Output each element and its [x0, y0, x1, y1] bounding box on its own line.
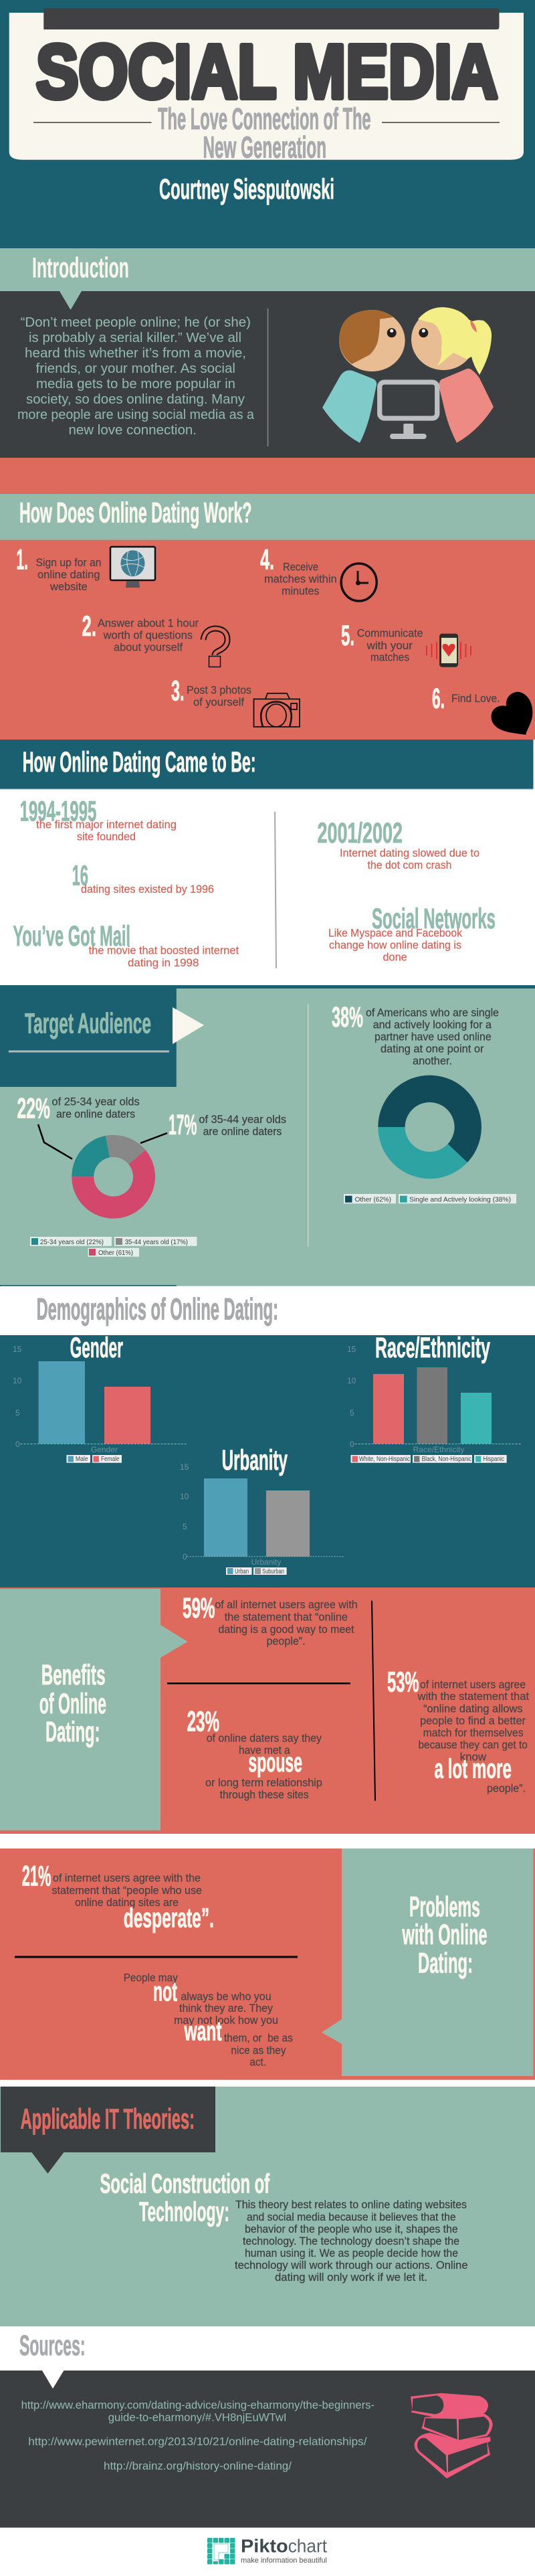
fact: you've got mail: You’ve Got Mail [13, 920, 130, 952]
step 4: minutes [282, 585, 320, 598]
stat: 59 percent: dating is a good way to meet [218, 1623, 354, 1636]
legend: age groups: 25-34 years old (22%) [40, 1238, 104, 1246]
fact: 1994-1995: site founded [77, 831, 136, 843]
bar chart: race and ethnicity [347, 1332, 522, 1463]
step 2 [82, 610, 227, 667]
heading: benefits [39, 1659, 106, 1748]
bar chart: gender: 15 [13, 1345, 22, 1354]
text: people may not: nice as they [231, 2044, 286, 2057]
step 5 [341, 620, 471, 667]
piktochart logo: make information beautiful [241, 2557, 327, 2565]
legend: actively looking [344, 1194, 516, 1204]
step 3 [171, 675, 300, 727]
step 6: Find Love. [451, 692, 500, 705]
heading: demographics: Demographics of Online Dating: [37, 1292, 278, 1326]
bar chart: gender [13, 1332, 187, 1463]
bar chart: race and ethnicity: 10 [347, 1376, 356, 1385]
intro text: heard this whether it’s from a movie, [25, 345, 246, 361]
intro text: more people are using social media as a [17, 407, 255, 422]
intro text: media gets to be more popular in [36, 376, 235, 392]
fact: you've got mail: the movie that boosted internet [89, 944, 239, 957]
bar chart: gender: Gender [70, 1332, 123, 1364]
piktochart logo: chart [288, 2535, 327, 2556]
step 5: matches [370, 651, 409, 664]
fact: you've got mail [13, 920, 239, 969]
stat: 22 percent: of 25-34 year olds [52, 1096, 140, 1108]
legend: age groups [30, 1237, 197, 1257]
step 6 [432, 683, 532, 735]
stat: 23 percent: or long term relationship [205, 1776, 322, 1789]
text: people may not: People may [124, 1972, 178, 1984]
source links [21, 2399, 374, 2472]
panel: how online dating came to be [0, 740, 534, 969]
bar chart: urbanity [180, 1444, 344, 1575]
stat: 38 percent: partner have used online [374, 1031, 492, 1043]
panel: demographics charts [0, 1332, 535, 1587]
source links: http://www.eharmony.com/dating-advice/using-eharmony/the-beginners- [21, 2399, 374, 2411]
stat: 21 percent [22, 1860, 214, 1933]
stat: 23 percent: of online daters say they [207, 1732, 322, 1745]
step 2: Answer about 1 hour [98, 617, 199, 630]
bar chart: gender: Female [101, 1455, 120, 1463]
stat: 53 percent: “online dating allows [423, 1703, 523, 1715]
stat: 22 percent: are online daters [56, 1108, 135, 1120]
fact: 2001/2002: 2001/2002 [317, 817, 403, 849]
piktochart logo: Pikto [241, 2535, 288, 2556]
panel: benefits of online dating [0, 1587, 535, 1834]
source links: guide-to-eharmony/#.VH8njEuWTwI [108, 2411, 287, 2423]
step 1: Sign up for an [36, 556, 102, 569]
intro text: “Don’t meet people online; he (or she) [21, 315, 251, 330]
stat: 53 percent: with the statement that [417, 1690, 529, 1703]
legend: age groups: 35-44 years old (17%) [125, 1238, 188, 1246]
panel: demographics heading [1, 1286, 534, 1335]
text: people may not: think they are. They [179, 2002, 273, 2014]
panel: introduction [0, 248, 535, 458]
heading: how does online dating work: How Does Online Dating Work? [19, 497, 251, 529]
legend: actively looking: Other (62%) [355, 1196, 391, 1204]
bar chart: race and ethnicity: White, Non-Hispanic [359, 1455, 410, 1463]
icon: monitor with globe [110, 547, 155, 588]
stat: 22 percent [17, 1093, 140, 1125]
stat: 23 percent: 23% [187, 1706, 219, 1738]
heading: benefits: of Online [39, 1688, 106, 1720]
text: people may not [124, 1972, 293, 2069]
stat: 59 percent: the statement that “online [225, 1611, 348, 1624]
stat: 53 percent: match for themselves [423, 1727, 524, 1739]
text: people may not: always be who you [181, 1990, 272, 2002]
stat: 53 percent: know [460, 1751, 487, 1764]
step 2: about yourself [114, 641, 183, 654]
fact: social networks: done [383, 951, 407, 964]
bar chart: race and ethnicity: Black, Non-Hispanic [422, 1455, 471, 1463]
fact: 2001/2002: the dot com crash [368, 859, 452, 871]
stat: 21 percent: desperate”. [124, 1902, 214, 1933]
heading: sources: Sources: [19, 2330, 86, 2362]
stat: 38 percent: another. [413, 1055, 452, 1067]
stat: 23 percent: through these sites [220, 1788, 309, 1801]
fact: 16 sites [72, 860, 214, 895]
subheading: social construction of technology: Social Construction of [100, 2168, 270, 2199]
panel: target audience [0, 985, 535, 1286]
fact: you've got mail: dating in 1998 [128, 956, 199, 969]
step 4: Receive [283, 561, 318, 574]
stat: 21 percent: of internet users agree with the [53, 1872, 201, 1885]
theory text: human using it. We as people decide how the [245, 2247, 458, 2259]
stat: 21 percent: 21% [22, 1860, 51, 1892]
piktochart logo [207, 2535, 327, 2565]
step 3: Post 3 photos [187, 684, 251, 697]
bar chart: gender: 10 [13, 1376, 22, 1385]
step 2: 2. [82, 610, 96, 642]
bar chart: race and ethnicity: Hispanic [483, 1455, 504, 1463]
stat: 59 percent [183, 1592, 358, 1648]
bar chart: urbanity: 15 [180, 1462, 189, 1472]
stat: 22 percent: 22% [17, 1093, 50, 1125]
fact: 16 sites: dating sites existed by 1996 [81, 883, 214, 895]
legend: age groups: Other (61%) [98, 1249, 133, 1257]
text: people may not: them, or be as [224, 2032, 293, 2045]
arrow [173, 1007, 204, 1044]
theory text: technology will work through our actions. Online [235, 2259, 468, 2271]
stat: 53 percent: of internet users agree [420, 1679, 526, 1691]
text: people may not: may not look how you [174, 2014, 278, 2027]
stat: 38 percent: and actively looking for a [373, 1019, 492, 1031]
legend: actively looking: Single and Actively looking (38%) [409, 1196, 511, 1204]
step 5: 5. [341, 620, 354, 652]
heading: how online dating came to be: How Online Dating Came to Be: [23, 746, 256, 778]
heading: problems [402, 1891, 488, 1979]
bar chart: gender: 0 [15, 1440, 20, 1449]
bar chart: urbanity: Urbanity [222, 1444, 288, 1476]
bar chart: urbanity: 10 [180, 1492, 189, 1501]
bar chart: race and ethnicity: 5 [350, 1408, 354, 1418]
step 5: with your [366, 639, 413, 652]
panel: problems with online dating [0, 1849, 535, 2080]
heading: target audience: Target Audience [25, 1007, 151, 1039]
fact: 2001/2002: Internet dating slowed due to [340, 847, 479, 859]
bar chart: urbanity: 0 [183, 1552, 187, 1561]
subheading: social construction of technology [100, 2168, 270, 2227]
intro text: society, so does online dating. Many [26, 392, 245, 407]
stat: 53 percent: 53% [387, 1666, 419, 1699]
bar chart: urbanity: Suburban [262, 1567, 284, 1575]
theory text [235, 2199, 468, 2284]
step 6: 6. [432, 683, 445, 715]
step 1: 1. [16, 544, 28, 576]
heading: benefits: Benefits [41, 1659, 106, 1691]
theory text: This theory best relates to online dating websites [235, 2199, 467, 2211]
fact: 2001/2002 [317, 817, 479, 871]
bar chart: urbanity: 5 [183, 1522, 187, 1531]
stat: 23 percent: have met a [239, 1744, 290, 1757]
icon: phone with heart [427, 634, 471, 667]
step 5: Communicate [357, 627, 423, 640]
text: people may not: act. [250, 2056, 266, 2069]
fact: 1994-1995: the first major internet dating [36, 819, 177, 831]
bar chart: race and ethnicity: 15 [347, 1345, 356, 1354]
step 4: 4. [260, 544, 274, 576]
source links: http://www.pewinternet.org/2013/10/21/online-dating-relationships/ [28, 2435, 367, 2448]
callout lines [38, 1124, 167, 1159]
text: people may not: not [153, 1976, 177, 2006]
stat: 59 percent: people”. [266, 1635, 306, 1648]
theory text: dating will only work if we let it. [275, 2271, 427, 2284]
theory text: behavior of the people who use it, shapes the [245, 2223, 458, 2235]
icon: clock [341, 564, 377, 601]
fact: social networks: change how online dating is [329, 939, 461, 952]
icon: couple at computer [322, 307, 494, 443]
stat: 17 percent: are online daters [203, 1125, 282, 1138]
icon: question mark [203, 628, 227, 667]
fact: social networks: Like Myspace and Facebook [328, 926, 462, 939]
step 4: matches within [264, 573, 337, 586]
icon: camera [254, 693, 300, 727]
fact: 1994-1995 [20, 796, 177, 843]
bar chart: gender: 5 [15, 1408, 20, 1418]
stat: 21 percent: statement that “people who use [52, 1884, 202, 1897]
icon: heart [492, 692, 532, 735]
bar chart: race and ethnicity: Race/Ethnicity [413, 1445, 464, 1454]
fact: 16 sites: 16 [72, 860, 88, 892]
donut chart: age groups [72, 1135, 155, 1219]
panel: header [0, 0, 535, 248]
bar chart: race and ethnicity: 0 [350, 1440, 354, 1449]
intro text [17, 315, 255, 438]
stat: 38 percent [332, 1001, 499, 1067]
step 2: worth of questions [103, 629, 193, 642]
source links: http://brainz.org/history-online-dating/ [104, 2460, 292, 2472]
heading: introduction: Introduction [32, 252, 129, 284]
text: people may not: want [184, 2015, 222, 2046]
stat: 38 percent: 38% [332, 1001, 363, 1033]
panel: applicable IT theories [0, 2087, 535, 2326]
bar chart: gender: Gender [91, 1445, 118, 1454]
stat: 53 percent [387, 1666, 529, 1795]
fact: 1994-1995: 1994-1995 [20, 796, 96, 828]
stat: 53 percent: people”. [487, 1782, 526, 1795]
stat: 23 percent: spouse [248, 1747, 302, 1778]
heading: benefits: Dating: [45, 1716, 100, 1748]
subtitle: New Generation [203, 131, 326, 165]
fact: social networks [328, 903, 496, 964]
stat: 17 percent: 17% [169, 1109, 197, 1141]
intro text: friends, or your mother. As social [36, 361, 235, 376]
intro text: new love connection. [68, 422, 197, 438]
step 1 [16, 544, 155, 593]
donut chart: actively looking [378, 1076, 481, 1179]
panel: how does online dating work [0, 458, 535, 740]
stat: 38 percent: of Americans who are single [366, 1006, 499, 1019]
bar chart: gender: Male [76, 1455, 88, 1463]
step 1: online dating [37, 568, 100, 581]
stat: 17 percent [169, 1109, 286, 1141]
intro text: is probably a serial killer.” We’ve all [29, 330, 241, 345]
stat: 17 percent: of 35-44 year olds [199, 1113, 286, 1126]
bar chart: urbanity: Urban [235, 1567, 249, 1575]
icon: stack of books [411, 2393, 493, 2478]
step 3: 3. [171, 675, 185, 707]
theory text: and social media because it believes that the [247, 2211, 456, 2223]
step 3: of yourself [193, 696, 244, 709]
subtitle [158, 102, 371, 165]
theory text: technology. The technology doesn’t shape the [243, 2235, 459, 2247]
bar chart: urbanity: Urbanity [251, 1557, 281, 1567]
stat: 23 percent [187, 1706, 322, 1801]
stat: 21 percent: online dating sites are [75, 1896, 179, 1909]
step 4 [260, 544, 377, 601]
stat: 59 percent: of all internet users agree with [215, 1598, 358, 1611]
stat: 38 percent: dating at one point or [381, 1043, 484, 1055]
heading: problems: Dating: [418, 1947, 473, 1979]
subheading: social construction of technology: Technology: [139, 2197, 229, 2227]
author: Courtney Siesputowski [159, 173, 334, 205]
step 1: website [49, 580, 88, 593]
panel: sources [0, 2371, 535, 2528]
stat: 53 percent: people to find a better [420, 1715, 526, 1727]
stat: 59 percent: 59% [183, 1592, 215, 1624]
heading: applicable IT theories: Applicable IT Theories: [21, 2103, 195, 2136]
